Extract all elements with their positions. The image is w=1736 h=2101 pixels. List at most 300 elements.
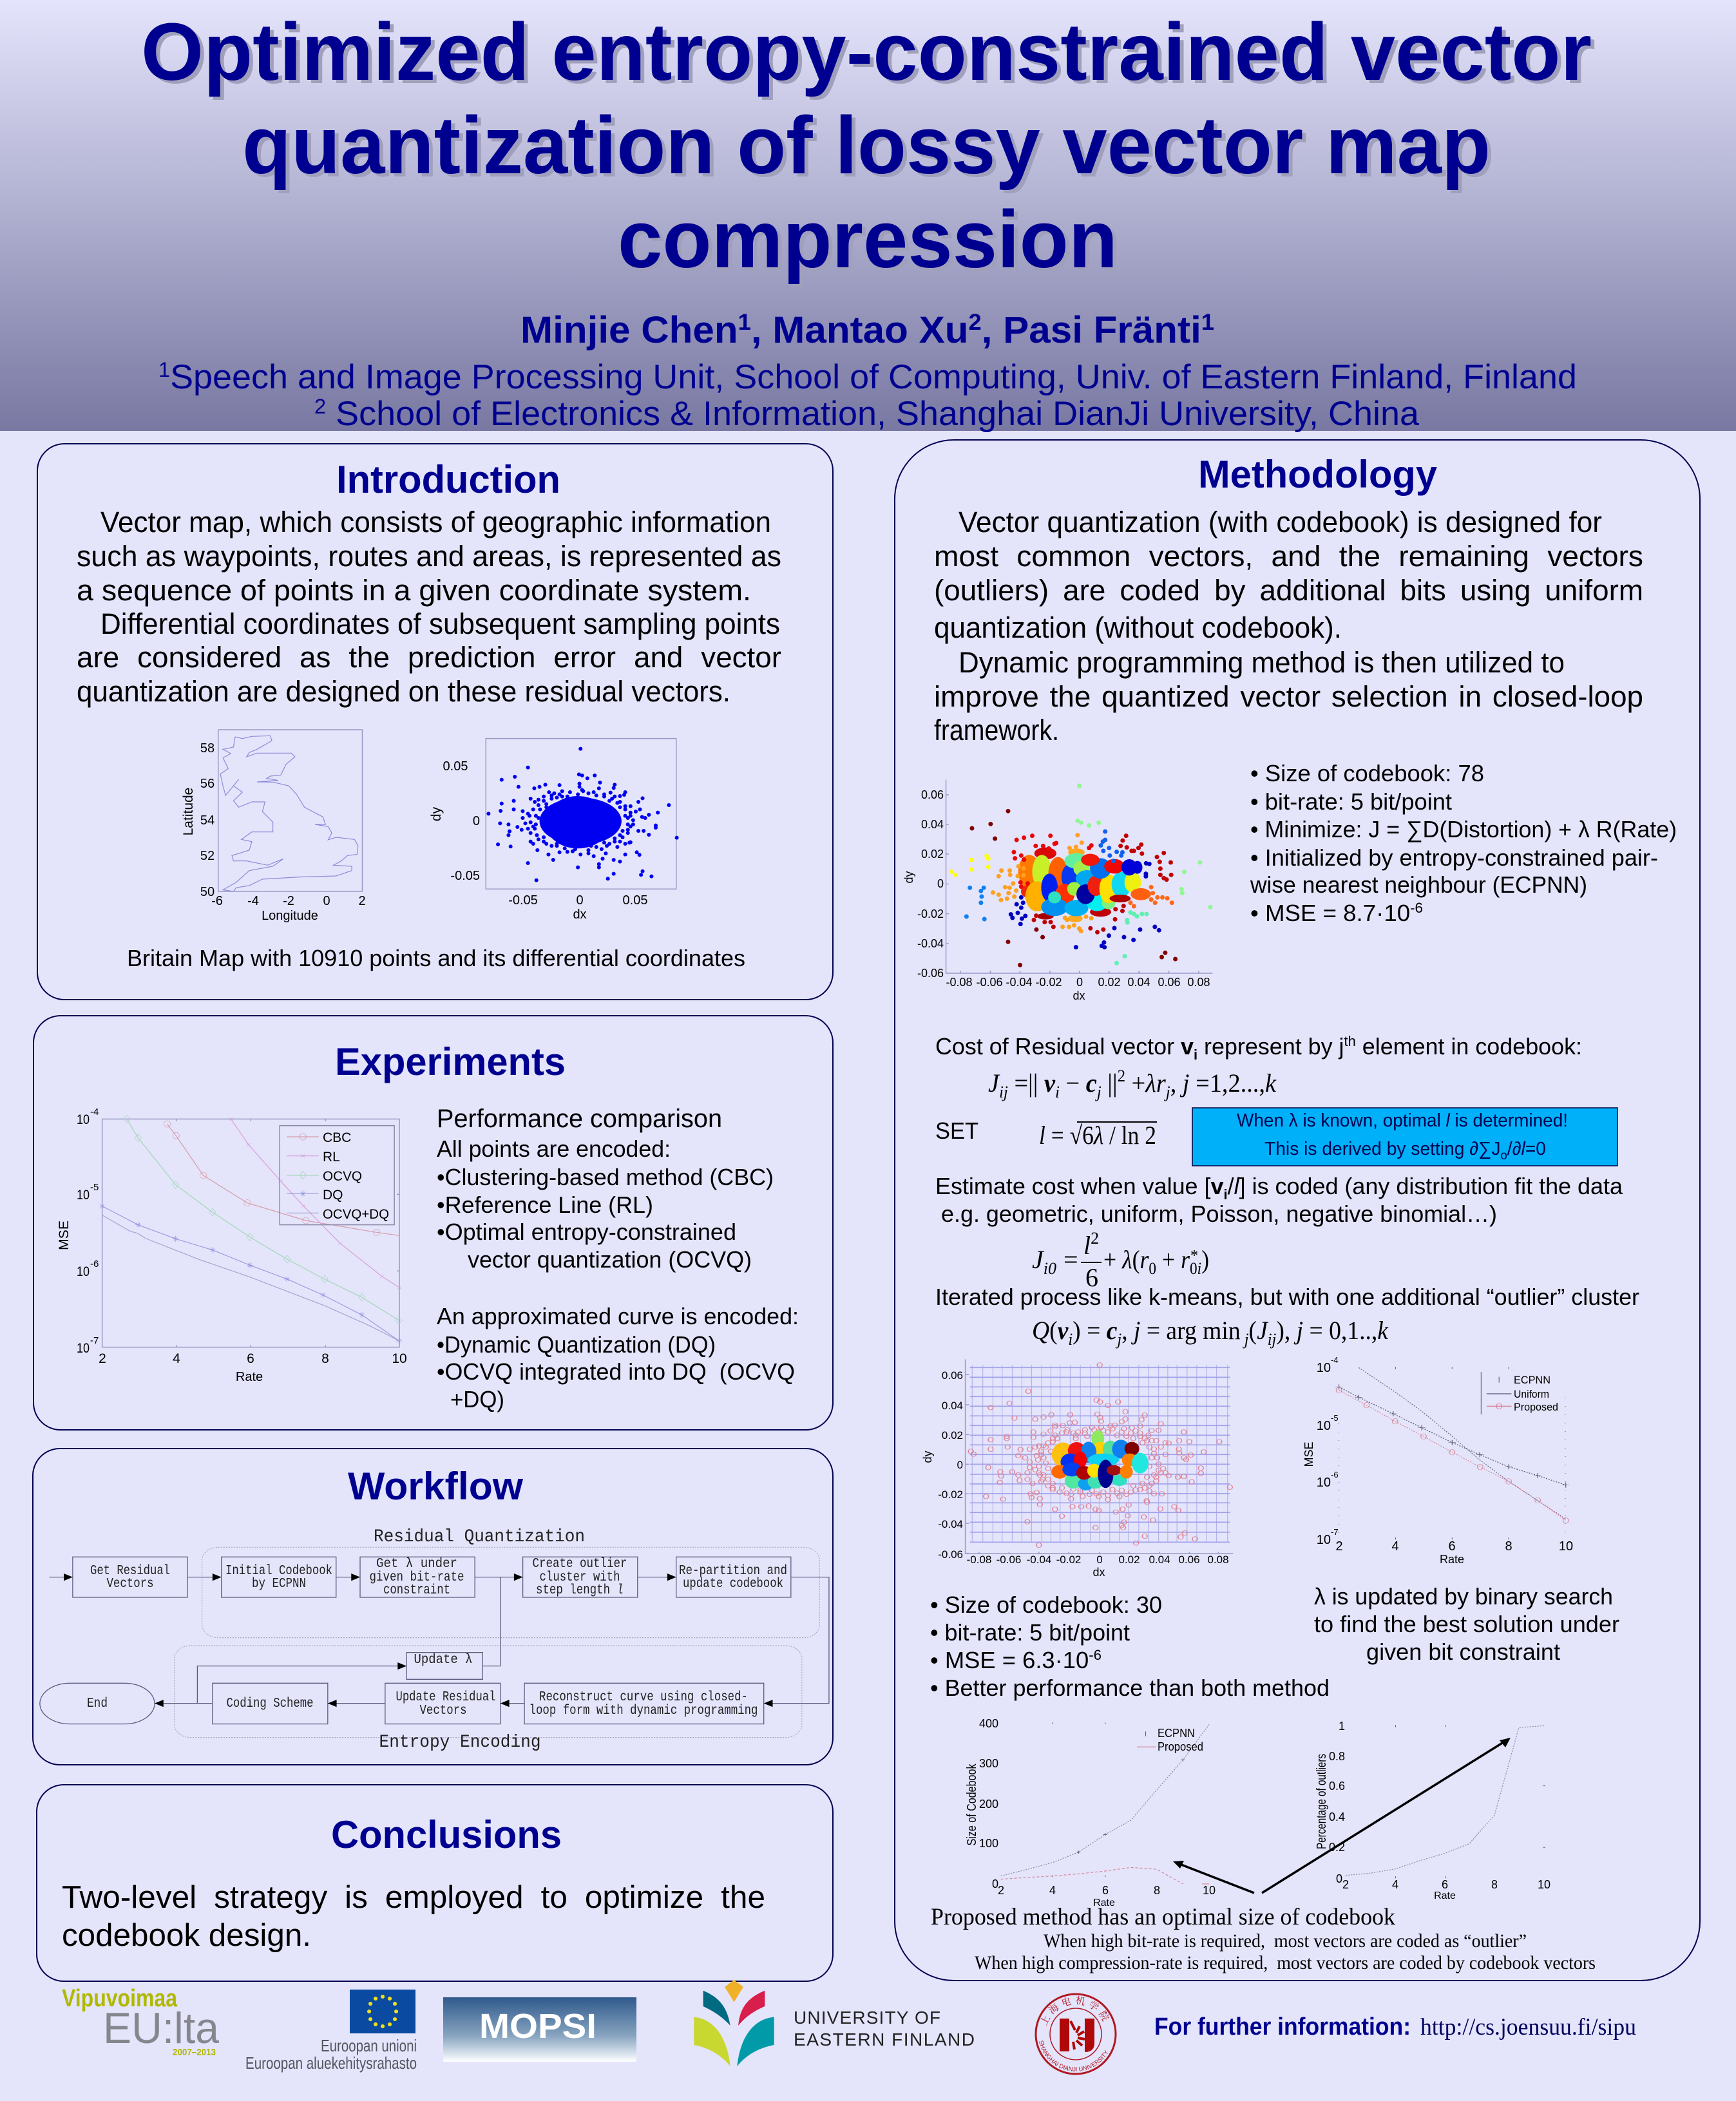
chart: performance comparison: 10: [77, 1341, 90, 1356]
formula: cost J_ij: +: [1125, 1069, 1145, 1098]
formula: quantizer: c: [1107, 1316, 1118, 1345]
chart: codebook size vs rate: ECPNN: [1158, 1727, 1195, 1740]
affiliations: [158, 358, 1577, 433]
formula: quantizer: J: [1257, 1316, 1268, 1345]
text block: binary search note: [1314, 1583, 1619, 1665]
text block: introduction body: Differential coordinates of subsequent sampling points: [100, 607, 780, 640]
chart: outlier grid scatter: 0.08: [1207, 1554, 1229, 1566]
flowchart: workflow diagram: Vectors: [107, 1577, 153, 1592]
formula: quantizer: Q(v: [1032, 1316, 1069, 1345]
formula: quantizer: j: [1241, 1330, 1249, 1349]
chart: MSE vs rate comparison: 2: [1335, 1539, 1343, 1554]
chart: performance comparison: CBC: [323, 1130, 351, 1145]
chart: outlier percentage vs rate: Percentage of outliers: [1315, 1754, 1329, 1849]
chart: differential coordinates scatter: -0.05: [508, 893, 538, 908]
text block: methodology body: [934, 506, 1643, 746]
chart: codebook size vs rate: Rate: [1093, 1897, 1115, 1908]
chart: outlier grid scatter: dy: [921, 1450, 934, 1463]
chart: Britain map: -6: [211, 894, 223, 908]
chart: MSE vs rate comparison: 10: [1317, 1476, 1331, 1490]
text: cost of residual vector: element in codebook:: [1356, 1033, 1582, 1060]
formula: outlier cost: l: [1083, 1231, 1091, 1260]
callout: optimal l: When λ is known, optimal l is determined!: [1237, 1110, 1568, 1131]
chart: codebook size vs rate: 8: [1154, 1884, 1160, 1897]
text: further information: http://cs.joensuu.fi/sipu: [1420, 2014, 1636, 2040]
text block: performance comparison: •Dynamic Quantization (DQ): [437, 1331, 716, 1358]
text block: conclusions body: [62, 1879, 765, 1953]
formula: quantizer: i: [1068, 1330, 1073, 1349]
chart: MSE vs rate comparison: 10: [1317, 1361, 1331, 1375]
flowchart: workflow diagram: Get Residual: [90, 1564, 170, 1579]
text block: performance comparison: Performance comparison: [437, 1105, 722, 1133]
authors: , Mantao Xu: [751, 309, 969, 351]
text block: codebook 78 bullets: • bit-rate: 5 bit/point: [1250, 788, 1452, 815]
text block: estimate cost: /: [1228, 1173, 1234, 1199]
flowchart: workflow diagram: Re-partition and: [679, 1564, 787, 1579]
chart: codebook size vs rate: Proposed: [1158, 1740, 1203, 1753]
panel: workflow: [33, 1449, 833, 1765]
title: compression: [618, 194, 1118, 285]
logo: European Union flag: [245, 1990, 417, 2073]
logo: University of Eastern Finland: UNIVERSITY OF: [794, 2008, 940, 2028]
formula: quantizer: (: [1249, 1316, 1257, 1345]
chart: MSE vs rate comparison: Uniform: [1514, 1389, 1549, 1400]
text: further information: [1154, 2013, 1636, 2040]
text block: methodology body: improve the quantized vector selection in closed-loop: [934, 680, 1643, 713]
logo: Vipuvoimaa EU:lta: Vipuvoimaa: [62, 1985, 178, 2012]
chart: MSE vs rate comparison: Rate: [1440, 1553, 1464, 1566]
chart: outlier percentage vs rate: [1315, 1720, 1550, 1901]
text block: codebook 78 bullets: • Initialized by entropy-constrained pair-: [1250, 844, 1658, 871]
chart: outlier grid scatter: 0.02: [942, 1429, 963, 1441]
chart: outlier grid scatter: 0: [1096, 1554, 1103, 1566]
flowchart: workflow diagram: Update Residual: [396, 1690, 496, 1705]
text block: binary search note: to find the best solution under: [1314, 1611, 1619, 1637]
chart: outlier percentage vs rate: 0.2: [1329, 1841, 1345, 1854]
text block: estimate cost: e.g. geometric, uniform, Poisson, negative binomial…): [941, 1201, 1497, 1227]
text block: proposed method note: Proposed method has an optimal size of codebook: [931, 1904, 1395, 1930]
text block: methodology body: framework.: [934, 714, 1059, 746]
formula: cost J_ij: ij: [999, 1083, 1008, 1101]
formula: optimal step length: l = √6λ / ln 2: [1039, 1121, 1156, 1150]
text block: introduction body: a sequence of points in a given coordinate system.: [77, 574, 751, 607]
formula: outlier cost: r: [1181, 1245, 1190, 1274]
chart: outlier percentage vs rate: 2: [1342, 1878, 1349, 1891]
chart: MSE vs rate comparison: 6: [1448, 1539, 1456, 1554]
chart: performance comparison: 10: [77, 1112, 90, 1127]
flowchart: workflow diagram: Vectors: [420, 1704, 466, 1718]
chart: performance comparison: DQ: [323, 1188, 343, 1203]
formula: cost J_ij: =||: [1008, 1069, 1044, 1098]
chart: clustered scatter: dy: [902, 871, 915, 884]
callout: optimal l: This is derived by setting ∂∑J: [1264, 1139, 1507, 1159]
text: cost of residual vector: represent by j: [1197, 1033, 1344, 1060]
chart: performance comparison: 4: [173, 1351, 180, 1366]
logo: Shanghai DianJi University: SHANGHAI DIANJI UNIVERSITY: [1039, 2040, 1108, 2071]
text: SET: SET: [935, 1117, 978, 1144]
text block: introduction body: quantization are designed on these residual vectors.: [77, 675, 730, 708]
chart: Britain map: Longitude: [262, 909, 318, 923]
chart: outlier percentage vs rate: 6: [1442, 1878, 1448, 1891]
chart: MSE vs rate comparison: 4: [1391, 1539, 1399, 1554]
formula: quantizer: ij: [1268, 1330, 1276, 1349]
text block: performance comparison: •Clustering-based method (CBC): [437, 1164, 774, 1190]
chart: differential coordinates scatter: dy: [429, 806, 444, 821]
text block: binary search note: given bit constraint: [1366, 1639, 1560, 1665]
chart: outlier percentage vs rate: Rate: [1434, 1890, 1456, 1901]
authors: 1: [738, 310, 751, 335]
formula: outlier cost: +: [1156, 1245, 1181, 1274]
text: cost of residual vector: th: [1344, 1033, 1356, 1049]
chart: performance comparison: 6: [247, 1351, 254, 1366]
text block: conclusions body: Two-level strategy is employed to optimize the: [62, 1879, 765, 1915]
text block: codebook 30 bullets: • MSE = 6.3·10: [930, 1647, 1087, 1673]
chart: Britain map: 0: [323, 894, 330, 908]
flowchart: workflow diagram: constraint: [383, 1583, 450, 1598]
chart: MSE vs rate comparison: -5: [1331, 1413, 1339, 1423]
chart: clustered scatter: -0.04: [917, 937, 944, 950]
logo: University of Eastern Finland: EASTERN FINLAND: [794, 2030, 975, 2049]
header band: [0, 0, 1736, 433]
formula: outlier cost: 6: [1085, 1263, 1098, 1292]
logo: European Union flag: Euroopan unioni: [321, 2036, 417, 2055]
flowchart: workflow diagram: Initial Codebook: [225, 1564, 332, 1579]
chart: outlier percentage vs rate: 4: [1392, 1878, 1398, 1891]
text block: proposed method note: When high compression-rate is required, most vectors are coded by codebook vectors: [975, 1952, 1596, 1973]
chart: outlier grid scatter: [921, 1360, 1233, 1579]
chart: performance comparison: -6: [90, 1259, 99, 1269]
formula: cost J_ij: ||: [1102, 1069, 1118, 1098]
chart: performance comparison: Rate: [236, 1370, 263, 1384]
chart: performance comparison: -4: [90, 1107, 99, 1117]
chart: MSE vs rate comparison: -6: [1331, 1470, 1339, 1479]
panel: conclusions: [37, 1785, 833, 1981]
chart: clustered scatter: 0: [937, 877, 944, 890]
formula: cost J_ij: 2: [1118, 1067, 1125, 1085]
chart: Britain map: 56: [200, 777, 215, 791]
title: Optimized entropy-constrained vector: [141, 6, 1592, 97]
formula: cost J_ij: ,: [1170, 1069, 1183, 1098]
text block: performance comparison: An approximated curve is encoded:: [437, 1303, 799, 1329]
text block: codebook 78 bullets: • Minimize: J = ∑D(Distortion) + λ R(Rate): [1250, 816, 1677, 842]
text block: codebook 78 bullets: -6: [1410, 900, 1423, 916]
chart: differential coordinates scatter: -0.05: [450, 869, 480, 883]
chart: outlier percentage vs rate: 0: [1336, 1872, 1342, 1885]
logo: MOPSI: [443, 1997, 636, 2062]
chart: clustered scatter: 0.08: [1187, 976, 1210, 989]
chart: Britain map: 52: [200, 849, 215, 863]
text: iterated process: Iterated process like k-means, but with one additional “outlier” cluster: [935, 1284, 1639, 1310]
chart: clustered scatter: 0.04: [1127, 976, 1150, 989]
chart: Britain map: Latitude: [181, 788, 196, 835]
text block: codebook 30 bullets: • Better performance than both method: [930, 1675, 1330, 1701]
chart: MSE vs rate comparison: -4: [1331, 1355, 1339, 1365]
authors: 2: [969, 310, 982, 335]
flowchart: workflow diagram: update codebook: [683, 1577, 783, 1592]
formula: quantizer: j: [1116, 1330, 1121, 1349]
text block: performance comparison: [437, 1105, 799, 1412]
chart: outlier grid scatter: 0.04: [942, 1400, 963, 1412]
chart: MSE vs rate comparison: Proposed: [1514, 1402, 1558, 1413]
text: further information: For further information:: [1154, 2013, 1411, 2040]
chart: MSE vs rate comparison: [1302, 1355, 1573, 1566]
chart: MSE vs rate comparison: -7: [1331, 1527, 1339, 1537]
chart: performance comparison: 2: [99, 1351, 106, 1366]
text block: introduction body: are considered as the prediction error and vector: [77, 641, 781, 674]
chart: MSE vs rate comparison: 10: [1317, 1419, 1331, 1433]
chart: differential coordinates scatter: 0: [576, 893, 584, 908]
chart: outlier grid scatter: 0.04: [1149, 1554, 1170, 1566]
formula: outlier cost: + λ(r: [1103, 1245, 1150, 1274]
chart: performance comparison: 10: [392, 1351, 407, 1366]
chart: codebook size vs rate: 2: [998, 1884, 1004, 1897]
formula: quantizer: j = 0,1..,k: [1297, 1316, 1389, 1345]
chart: outlier grid scatter: dx: [1092, 1566, 1105, 1579]
chart: codebook size vs rate: 6: [1102, 1884, 1109, 1897]
heading: introduction: Introduction: [336, 458, 560, 501]
chart: performance comparison: -5: [90, 1182, 99, 1193]
caption: Britain map: Britain Map with 10910 points and its differential coordinates: [127, 945, 745, 971]
chart: MSE vs rate comparison: MSE: [1302, 1441, 1315, 1467]
text block: methodology body: Dynamic programming method is then utilized to: [959, 646, 1565, 679]
chart: outlier grid scatter: -0.08: [967, 1554, 991, 1566]
chart: clustered scatter: -0.04: [1006, 976, 1033, 989]
chart: codebook size vs rate: [965, 1717, 1216, 1908]
title: quantization of lossy vector map: [242, 100, 1491, 191]
chart: outlier grid scatter: 0: [957, 1459, 963, 1471]
panel: experiments: [33, 1016, 833, 1430]
text block: proposed method note: When high bit-rate is required, most vectors are coded as “outlier”: [1044, 1930, 1527, 1952]
callout: optimal l: /∂: [1507, 1139, 1521, 1159]
chart: differential coordinates scatter: 0: [473, 814, 480, 828]
flowchart: workflow diagram: by ECPNN: [252, 1577, 306, 1592]
chart: codebook size vs rate: 200: [979, 1798, 998, 1811]
chart: MSE vs rate comparison: 10: [1317, 1533, 1331, 1547]
text block: estimate cost: i: [1224, 1186, 1228, 1203]
chart: outlier grid scatter: -0.04: [938, 1518, 963, 1530]
flowchart: workflow diagram: Residual Quantization: [374, 1527, 585, 1547]
text block: proposed method note: [931, 1904, 1596, 1973]
chart: outlier grid scatter: 0.06: [1178, 1554, 1200, 1566]
callout: optimal l: l=0: [1521, 1139, 1547, 1159]
chart: clustered scatter: -0.06: [976, 976, 1003, 989]
text block: introduction body: Vector map, which consists of geographic information: [100, 506, 771, 538]
chart: differential coordinates scatter: 0.05: [443, 759, 468, 774]
text block: performance comparison: All points are encoded:: [437, 1136, 671, 1162]
chart: performance comparison: OCVQ+DQ: [323, 1207, 389, 1222]
chart: Britain map: -2: [283, 894, 294, 908]
formula: cost J_ij: i: [1055, 1083, 1060, 1101]
text block: methodology body: quantization (without codebook).: [934, 611, 1342, 644]
logo: Vipuvoimaa EU:lta: [62, 1985, 219, 2058]
text: cost of residual vector: i: [1194, 1047, 1197, 1063]
formula: outlier cost: 0: [1190, 1259, 1197, 1278]
formula: outlier cost: 0: [1149, 1259, 1156, 1278]
logo: Shanghai DianJi University: [1035, 1993, 1117, 2075]
affiliations: 1: [158, 358, 170, 381]
logo: Vipuvoimaa EU:lta: EU:lta: [103, 2004, 219, 2053]
formula: cost J_ij: J: [988, 1069, 1000, 1098]
text block: methodology body: (outliers) are coded by additional bits using uniform: [934, 574, 1643, 607]
text block: codebook 78 bullets: • Size of codebook: 78: [1250, 760, 1484, 786]
arrow: to codebook size chart: [1173, 1861, 1254, 1893]
logo: University of Eastern Finland: [694, 1980, 975, 2066]
chart: outlier percentage vs rate: 1: [1339, 1720, 1345, 1733]
text block: estimate cost: Estimate cost when value [v: [935, 1173, 1224, 1199]
text block: codebook 30 bullets: • bit-rate: 5 bit/point: [930, 1619, 1130, 1646]
chart: clustered scatter: [902, 780, 1212, 1002]
chart: codebook size vs rate: 100: [979, 1837, 998, 1850]
chart: outlier percentage vs rate: 0.6: [1329, 1780, 1345, 1792]
chart: Britain map: -4: [247, 894, 259, 908]
text block: codebook 78 bullets: wise nearest neighbour (ECPNN): [1250, 871, 1587, 898]
chart: codebook size vs rate: Size of Codebook: [965, 1764, 979, 1846]
heading: methodology: Methodology: [1198, 453, 1438, 496]
text block: performance comparison: •Reference Line (RL): [437, 1192, 653, 1218]
chart: MSE vs rate comparison: ECPNN: [1514, 1374, 1550, 1386]
formula: quantizer: ) =: [1073, 1316, 1107, 1345]
text block: methodology body: Vector quantization (with codebook) is designed for: [959, 506, 1602, 538]
text block: codebook 78 bullets: • MSE = 8.7·10: [1250, 900, 1407, 926]
panel: methodology: [895, 440, 1700, 1981]
chart: Britain map: 2: [358, 894, 366, 908]
chart: Britain map: 50: [200, 885, 215, 899]
text block: performance comparison: •Optimal entropy-constrained: [437, 1219, 736, 1245]
text block: introduction body: [77, 506, 781, 708]
text block: codebook 78 bullets: [1250, 760, 1677, 926]
logo: Vipuvoimaa EU:lta: 2007–2013: [173, 2047, 216, 2058]
chart: codebook size vs rate: 0: [992, 1878, 998, 1890]
chart: clustered scatter: 0.04: [921, 818, 944, 831]
chart: performance comparison: 8: [321, 1351, 329, 1366]
text: cost of residual vector: Cost of Residual vector v: [935, 1033, 1194, 1060]
formula: cost J_ij: v: [1044, 1069, 1056, 1098]
formula: cost J_ij: c: [1086, 1069, 1097, 1098]
formula: outlier cost: J: [1032, 1245, 1044, 1274]
affiliations: 2: [314, 395, 326, 418]
text block: introduction body: such as waypoints, routes and areas, is represented as: [77, 540, 781, 573]
flowchart: workflow diagram: given bit-rate: [370, 1570, 464, 1585]
chart: performance comparison: MSE: [57, 1221, 72, 1250]
chart: MSE vs rate comparison: 8: [1505, 1539, 1512, 1554]
heading: workflow: Workflow: [348, 1465, 523, 1508]
chart: outlier grid scatter: 0.06: [942, 1369, 963, 1382]
arrow: to outlier chart: [1262, 1738, 1511, 1893]
text block: binary search note: λ is updated by binary search: [1314, 1583, 1613, 1610]
text block: codebook 30 bullets: • Size of codebook: 30: [930, 1592, 1162, 1618]
formula: outlier cost: =: [1064, 1245, 1078, 1274]
text block: codebook 30 bullets: -6: [1089, 1647, 1102, 1663]
formula: outlier cost: 2: [1091, 1229, 1099, 1248]
chart: outlier grid scatter: -0.04: [1027, 1554, 1051, 1566]
affiliations: Speech and Image Processing Unit, School of Computing, Univ. of Eastern Finland, Finland: [170, 358, 1577, 396]
chart: clustered scatter: 0.06: [921, 788, 944, 801]
chart: outlier grid scatter: -0.02: [1056, 1554, 1081, 1566]
flowchart: workflow diagram: step length l: [536, 1583, 624, 1598]
logo: MOPSI: MOPSI: [479, 2007, 596, 2046]
formula: quantizer: ,: [1121, 1316, 1134, 1345]
logo: Shanghai DianJi University: 上海电机学院: [1041, 1995, 1109, 2026]
chart: clustered scatter: 0.06: [1158, 976, 1181, 989]
heading: conclusions: Conclusions: [331, 1813, 562, 1856]
text block: estimate cost: l] is coded (any distribution fit the data: [1234, 1173, 1623, 1199]
chart: performance comparison: 10: [77, 1188, 90, 1203]
authors: 1: [1201, 310, 1214, 335]
chart: performance comparison: [57, 1107, 407, 1384]
flowchart: workflow diagram: End: [87, 1697, 108, 1711]
formula: cost J_ij: j: [1164, 1083, 1170, 1101]
flowchart: workflow diagram: Create outlier: [532, 1557, 627, 1572]
chart: codebook size vs rate: 10: [1203, 1884, 1216, 1897]
chart: differential coordinates scatter: dx: [573, 908, 587, 922]
chart: outlier grid scatter: 0.02: [1118, 1554, 1140, 1566]
chart: clustered scatter: dx: [1073, 989, 1085, 1002]
formula: quantizer: ),: [1276, 1316, 1297, 1345]
flowchart: workflow diagram: Coding Scheme: [227, 1697, 313, 1711]
chart: outlier percentage vs rate: 8: [1491, 1878, 1498, 1891]
chart: Britain map: 54: [200, 813, 215, 828]
chart: outlier percentage vs rate: 0.4: [1329, 1811, 1345, 1823]
chart: performance comparison: -7: [90, 1335, 99, 1346]
flowchart: workflow diagram: Get λ under: [376, 1557, 457, 1572]
panel: introduction: [37, 444, 833, 1000]
chart: codebook size vs rate: 400: [979, 1717, 998, 1730]
chart: outlier grid scatter: -0.02: [938, 1488, 963, 1501]
formula: outlier cost: i: [1197, 1259, 1201, 1278]
chart: clustered scatter: -0.06: [917, 967, 944, 980]
text block: codebook 30 bullets: [930, 1592, 1330, 1701]
flowchart: workflow diagram: Update λ: [414, 1653, 473, 1668]
chart: clustered scatter: 0.02: [1098, 976, 1121, 989]
text block: conclusions body: codebook design.: [62, 1917, 311, 1953]
flowchart: workflow diagram: Entropy Encoding: [379, 1733, 541, 1753]
formula: cost J_ij: λr: [1145, 1069, 1167, 1098]
flowchart: workflow diagram: Reconstruct curve using closed-: [539, 1690, 748, 1705]
formula: quantizer: j = arg min: [1134, 1316, 1247, 1345]
chart: Britain map: 58: [200, 741, 215, 756]
formula: cost J_ij: −: [1060, 1069, 1086, 1098]
formula: cost J_ij: j: [1095, 1083, 1102, 1101]
authors: , Pasi Fränti: [982, 309, 1201, 351]
chart: MSE vs rate comparison: 10: [1559, 1539, 1573, 1554]
flowchart: workflow diagram: cluster with: [540, 1570, 620, 1585]
text block: performance comparison: +DQ): [450, 1386, 504, 1412]
text block: performance comparison: •OCVQ integrated into DQ (OCVQ: [437, 1358, 795, 1385]
authors: Minjie Chen: [520, 309, 730, 351]
chart: outlier percentage vs rate: 10: [1538, 1878, 1550, 1891]
title: [141, 6, 1592, 285]
flowchart: workflow diagram: [40, 1527, 829, 1753]
text block: performance comparison: vector quantization (OCVQ): [468, 1246, 752, 1273]
callout: optimal l: [1192, 1108, 1617, 1166]
chart: Britain map: [181, 730, 366, 923]
chart: differential coordinates scatter: [429, 739, 677, 922]
chart: performance comparison: OCVQ: [323, 1169, 362, 1184]
chart: clustered scatter: -0.02: [917, 908, 944, 920]
formula: outlier cost: ): [1201, 1245, 1209, 1274]
chart: differential coordinates scatter: 0.05: [623, 893, 647, 908]
chart: clustered scatter: 0.02: [921, 848, 944, 860]
formula: outlier cost: [1032, 1229, 1209, 1292]
chart legend: [280, 1126, 394, 1225]
chart: performance comparison: RL: [323, 1150, 340, 1165]
formula: outlier cost: i0: [1044, 1259, 1056, 1278]
chart: codebook size vs rate: 300: [979, 1757, 998, 1770]
heading: experiments: Experiments: [335, 1040, 566, 1083]
formula: outlier cost: *: [1190, 1248, 1198, 1264]
chart: outlier percentage vs rate: 0.8: [1329, 1750, 1345, 1763]
chart: outlier grid scatter: -0.06: [997, 1554, 1021, 1566]
